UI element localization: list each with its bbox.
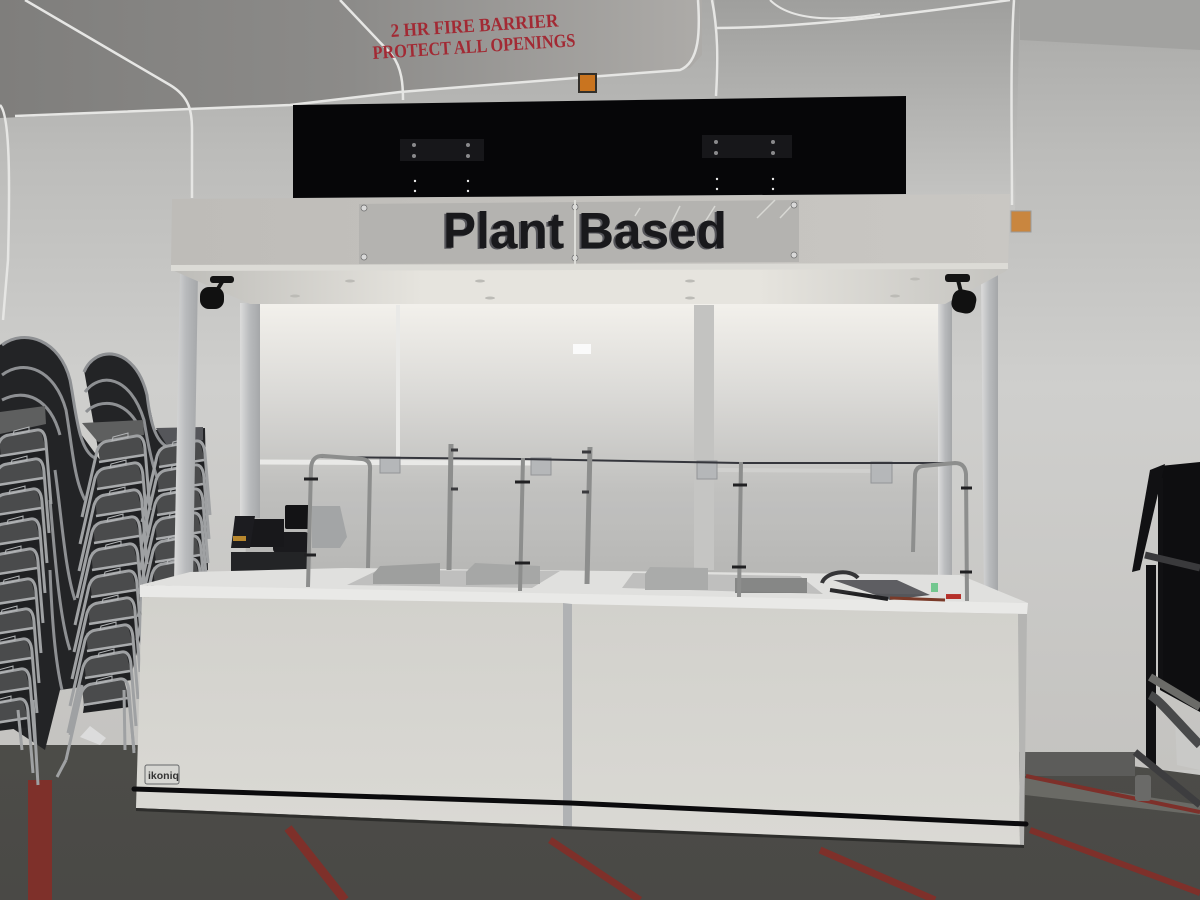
canopy underside bbox=[172, 268, 1008, 304]
floor bbox=[0, 745, 1200, 900]
stacked banquet chairs bbox=[0, 338, 210, 785]
fire barrier stencil text: PROTECT ALL OPENINGS bbox=[372, 30, 576, 64]
cabinet front left panel bbox=[136, 597, 563, 826]
chair seats on top bbox=[0, 406, 46, 434]
left track spotlight bbox=[200, 276, 234, 309]
fire barrier stencil text bbox=[372, 10, 576, 64]
background: upper right ceiling bbox=[1020, 0, 1200, 50]
fire barrier stencil text: 2 HR FIRE BARRIER bbox=[390, 10, 559, 42]
wall conduit pipes bbox=[0, 0, 1014, 320]
black menu board panel bbox=[293, 96, 906, 198]
acrylic sign plate bbox=[359, 200, 799, 264]
cabinet centre divider bbox=[563, 603, 572, 828]
crumpled tissue bbox=[80, 726, 106, 745]
rear canopy posts bbox=[240, 300, 952, 575]
chair back outlines bbox=[2, 338, 168, 690]
sneeze guard bbox=[304, 444, 972, 601]
left stack frames bbox=[0, 427, 51, 780]
right track spotlight bbox=[945, 274, 978, 315]
chair backs dark mass bbox=[0, 338, 208, 750]
orange junction box, wall bbox=[1011, 211, 1031, 232]
orange junction box, ceiling bbox=[579, 74, 596, 92]
kiosk back wall panel bbox=[245, 302, 948, 590]
ikoniq logo plate bbox=[145, 765, 179, 784]
background: upper right wall bbox=[715, 0, 1020, 210]
centre stack legs bbox=[57, 685, 134, 777]
canopy sign box bbox=[171, 194, 1010, 271]
right stack frames bbox=[137, 438, 210, 640]
cabinet front right panel bbox=[572, 604, 1027, 845]
POS terminal and cash drawer bbox=[231, 505, 347, 578]
ikoniq logo plate: ikoniq bbox=[148, 770, 179, 782]
centre stack frames bbox=[66, 433, 150, 760]
cabinet bottom shadow bbox=[136, 808, 1024, 848]
cabinet counter top with wells bbox=[140, 563, 1028, 614]
front canopy posts bbox=[174, 270, 998, 600]
left stack legs bbox=[18, 700, 38, 785]
black bumper rail bbox=[134, 789, 1026, 824]
black folding tables at right bbox=[1132, 462, 1200, 805]
background: ceiling bbox=[0, 0, 702, 118]
sign lettering: Plant Based bbox=[443, 202, 727, 259]
